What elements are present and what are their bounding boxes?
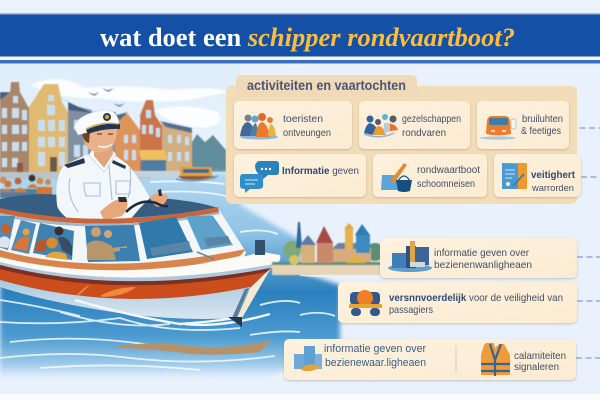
side stripe bbox=[0, 249, 246, 272]
card: gezelschappen rondvaren: rondvaren bbox=[402, 127, 446, 139]
card: informatie geven over bezienswaardigheden: bezienenwanligheaen bbox=[434, 259, 532, 271]
passengers on quay bbox=[0, 171, 180, 198]
building 5 bbox=[140, 100, 165, 172]
building 6 bbox=[162, 122, 192, 172]
windows bbox=[0, 216, 15, 250]
neck and head bbox=[94, 140, 113, 168]
white deck rail bbox=[0, 252, 280, 282]
card: rondvaartboot schoonmaken: rondwaartboot bbox=[417, 164, 480, 176]
card: toeristen ontvangen bbox=[234, 101, 352, 149]
blue tower bbox=[356, 235, 370, 253]
card: informatie geven over bezienswaardigheden bbox=[380, 238, 577, 278]
trees far shore bbox=[190, 134, 226, 172]
wiper bbox=[197, 252, 214, 259]
building 1 bbox=[0, 82, 29, 176]
roof stripe bbox=[0, 207, 219, 224]
yellow tower bbox=[345, 229, 353, 249]
card: veiligheid waarborgen: veitighert bbox=[531, 169, 575, 181]
bottom edge bbox=[0, 394, 600, 400]
collar bbox=[89, 146, 116, 172]
canal water bbox=[0, 172, 340, 378]
card: verantwoordelijk voor veiligheid: versnnvoerdelijk voor de veiligheid van bbox=[389, 292, 563, 304]
orange hull band bbox=[0, 265, 271, 299]
card: bruiloften en feesten bbox=[477, 101, 569, 149]
card: toeristen ontvangen: toeristen bbox=[283, 113, 323, 125]
captain bbox=[56, 110, 168, 222]
card: bezienswaardigheden en calamiteiten: signaleren bbox=[514, 361, 559, 373]
icon: speech bubbles bbox=[240, 161, 279, 193]
card: bezienswaardigheden en calamiteiten: informatie geven over bbox=[324, 343, 426, 355]
card: gezelschappen rondvaren bbox=[359, 101, 470, 149]
card: bezienswaardigheden en calamiteiten bbox=[284, 339, 576, 380]
card: rondvaartboot schoonmaken bbox=[373, 154, 487, 197]
boat cabin bbox=[0, 208, 246, 267]
icon: city skyline bbox=[294, 346, 322, 371]
bow lamp bbox=[255, 240, 265, 255]
building 3 bbox=[68, 104, 92, 174]
building 2 bbox=[29, 84, 68, 174]
lower hull bbox=[0, 280, 250, 319]
card: veiligheid waarborgen bbox=[494, 154, 581, 197]
connector lines bbox=[570, 128, 600, 358]
icon: city buildings bbox=[388, 241, 432, 272]
heading tab bbox=[236, 75, 417, 97]
card: informatie geven bbox=[234, 154, 366, 197]
arms and hands bbox=[100, 199, 127, 220]
icon: life vest bbox=[481, 343, 510, 376]
shirt bbox=[56, 150, 150, 222]
bow wave bbox=[75, 300, 270, 325]
tour boat bbox=[0, 207, 280, 327]
card: toeristen ontvangen: ontveungen bbox=[283, 127, 331, 139]
tour ferry in background bbox=[176, 167, 218, 181]
cockpit interior bbox=[0, 194, 218, 219]
building 4 bbox=[92, 112, 116, 174]
card: rondvaartboot schoonmaken: schoomneisen bbox=[417, 178, 475, 190]
title: wat doet een schipper rondvaartboot? bbox=[100, 23, 515, 52]
tower left bbox=[296, 222, 302, 248]
passengers in boat bbox=[1, 224, 11, 234]
card: informatie geven over bezienswaardigheden: informatie geven over bbox=[434, 247, 529, 259]
icon: orange bus bbox=[480, 116, 516, 140]
card: bezienswaardigheden en calamiteiten: calamiteiten bbox=[514, 350, 566, 362]
heading tab: activiteiten en vaartochten bbox=[247, 77, 406, 93]
steering wheel bbox=[126, 202, 168, 212]
icon: bucket and brush bbox=[381, 163, 412, 192]
shop awning bbox=[139, 150, 167, 160]
roof accents bbox=[0, 92, 92, 113]
icon: safety document bbox=[502, 163, 527, 189]
icon: tourists group bbox=[240, 113, 278, 140]
card: verantwoordelijk voor veiligheid: passagiers bbox=[389, 304, 433, 316]
card: bruiloften en feesten: & feetiges bbox=[521, 125, 561, 137]
panel: activiteiten en vaartochten bbox=[226, 75, 581, 204]
houses bbox=[301, 245, 315, 263]
card: veiligheid waarborgen: warrorden bbox=[531, 183, 574, 194]
card: bezienswaardigheden en calamiteiten: bezienewaar.ligheaen bbox=[325, 357, 426, 369]
town on the far shore bbox=[272, 222, 384, 275]
card: gezelschappen rondvaren: gezelschappen bbox=[402, 113, 461, 125]
icon: groups bbox=[364, 114, 398, 137]
card: informatie geven: Informatie geven bbox=[282, 165, 359, 177]
harbour scene: sky, clouds and canal buildings bbox=[0, 64, 240, 189]
card: verantwoordelijk voor veiligheid bbox=[338, 282, 577, 323]
icon: safety gear bbox=[349, 290, 382, 316]
card: bruiloften en feesten: bruiluhten bbox=[522, 113, 563, 125]
epaulettes bbox=[64, 158, 126, 169]
cap bbox=[74, 110, 120, 135]
header band bbox=[0, 0, 600, 64]
windows bbox=[2, 95, 189, 167]
